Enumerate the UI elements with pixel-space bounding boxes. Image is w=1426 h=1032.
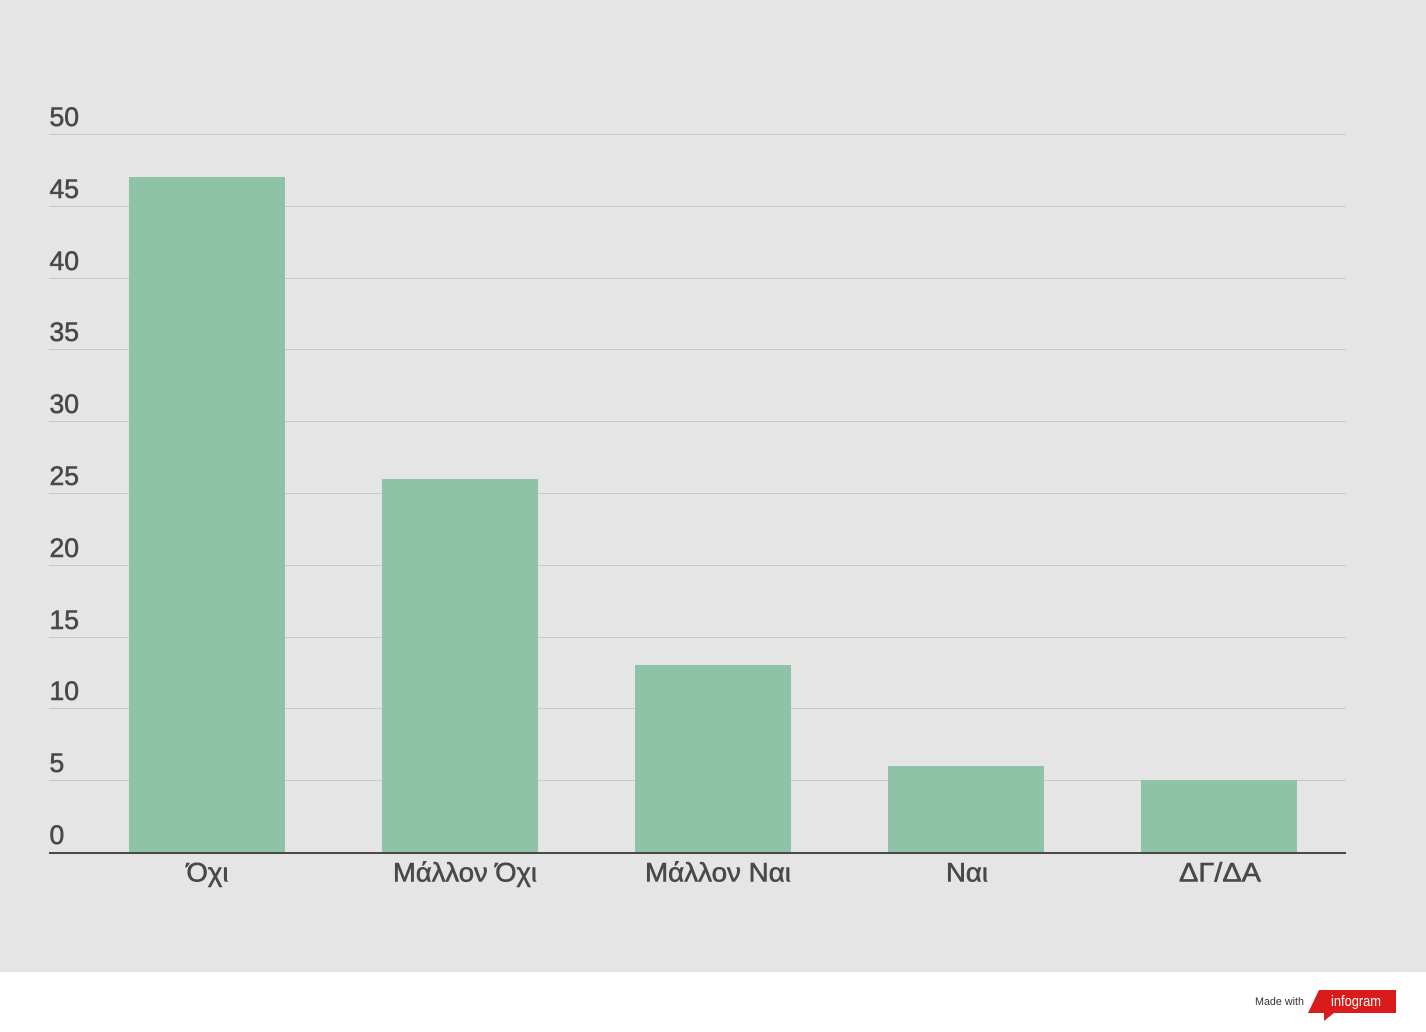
bar chart: bars [129,177,1297,853]
x-axis line [49,852,1346,854]
y-axis labels: 15 [50,605,79,635]
y-axis labels: 45 [50,174,79,204]
x-axis labels: Μάλλον Όχι [393,858,537,888]
y-axis labels: 30 [50,389,79,419]
y-axis labels: 20 [50,533,79,563]
footer: made with infogram [1255,990,1396,1021]
y-axis labels: 0 [50,820,64,850]
y-axis labels: 5 [50,748,64,778]
x-axis labels [185,858,1261,888]
icon: infogram logo flag [1308,990,1396,1021]
x-axis labels: ΔΓ/ΔΑ [1179,858,1261,888]
x-axis labels: Όχι [185,858,228,888]
y-axis labels: 25 [50,461,79,491]
x-axis labels: Μάλλον Ναι [645,858,791,888]
y-axis labels: 10 [50,676,79,706]
y-axis labels: 50 [50,102,79,132]
y-axis labels [50,102,79,850]
x-axis labels: Ναι [946,858,988,888]
y-axis labels: 40 [50,246,79,276]
logo wordmark: infogram [1331,993,1381,1010]
made with text: Made with [1255,996,1304,1008]
y-axis labels: 35 [50,317,79,347]
